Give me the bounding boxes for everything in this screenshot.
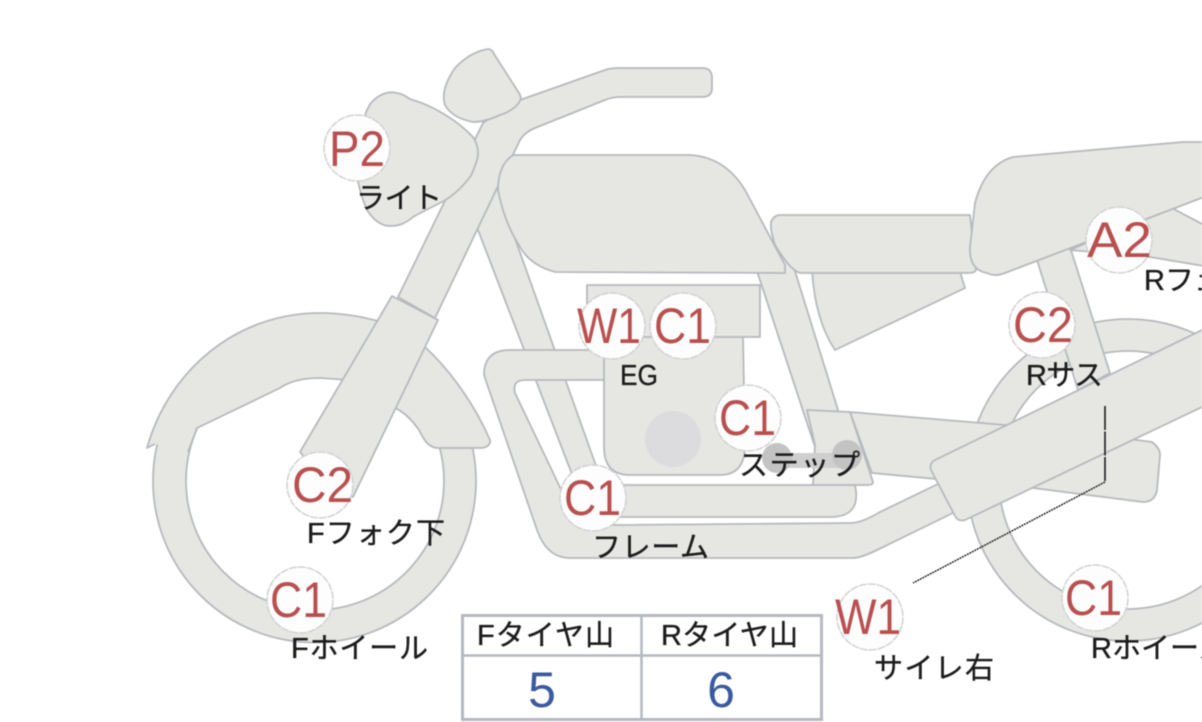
fork and handlebar	[398, 68, 712, 318]
value: front tread: 5	[528, 662, 556, 718]
tire tread table	[462, 615, 822, 720]
label: headlight: ライト	[356, 183, 442, 215]
marker: engine W1: W1	[577, 298, 641, 354]
marker: headlight P2: P2	[329, 121, 385, 177]
foot step plate	[807, 410, 873, 485]
marker: step C1: C1	[719, 390, 776, 446]
table header: rear tread: Rタイヤ山	[661, 620, 798, 652]
front seat	[771, 215, 976, 273]
headlight	[356, 92, 478, 226]
rear seat	[970, 142, 1202, 275]
marker: rear fender A2: A2	[1087, 212, 1152, 268]
engine	[587, 285, 760, 475]
fuel tank	[498, 155, 785, 273]
marker: front wheel C1: C1	[270, 572, 327, 628]
speedometer	[444, 49, 521, 122]
label: engine: EG	[620, 360, 658, 392]
muffler leader line	[913, 406, 1105, 583]
rear frame tube	[754, 255, 838, 447]
label: frame: フレーム	[592, 532, 709, 564]
marker: lower fork C2: C2	[292, 457, 353, 513]
label: front wheel: Fホイール	[291, 633, 428, 665]
frame down tube and upper exhaust	[470, 170, 856, 517]
marker: rear shock C2: C2	[1013, 297, 1073, 353]
rear wheel	[967, 319, 1202, 641]
table header: front tread: Fタイヤ山	[477, 620, 614, 652]
side cover	[812, 270, 965, 350]
label: rear shock: Rサス	[1026, 360, 1103, 392]
lower exhaust pipe	[484, 350, 955, 558]
value: rear tread: 6	[707, 662, 735, 718]
lower fork tube	[300, 296, 438, 497]
rear shock	[1037, 247, 1110, 390]
marker: rear wheel C1: C1	[1065, 570, 1122, 626]
marker: muffler W1: W1	[835, 589, 901, 645]
muffler	[930, 329, 1202, 520]
front wheel	[153, 319, 476, 642]
rear fender	[1070, 207, 1202, 266]
label: lower fork: Fフォク下	[307, 518, 445, 550]
marker: engine C1: C1	[654, 298, 711, 354]
label: step: ステップ	[739, 450, 860, 482]
marker: frame C1: C1	[564, 470, 621, 526]
foot step bar	[762, 440, 862, 473]
swingarm	[850, 412, 1160, 502]
label: muffler: サイレ右	[874, 652, 994, 685]
front fender	[147, 313, 490, 452]
